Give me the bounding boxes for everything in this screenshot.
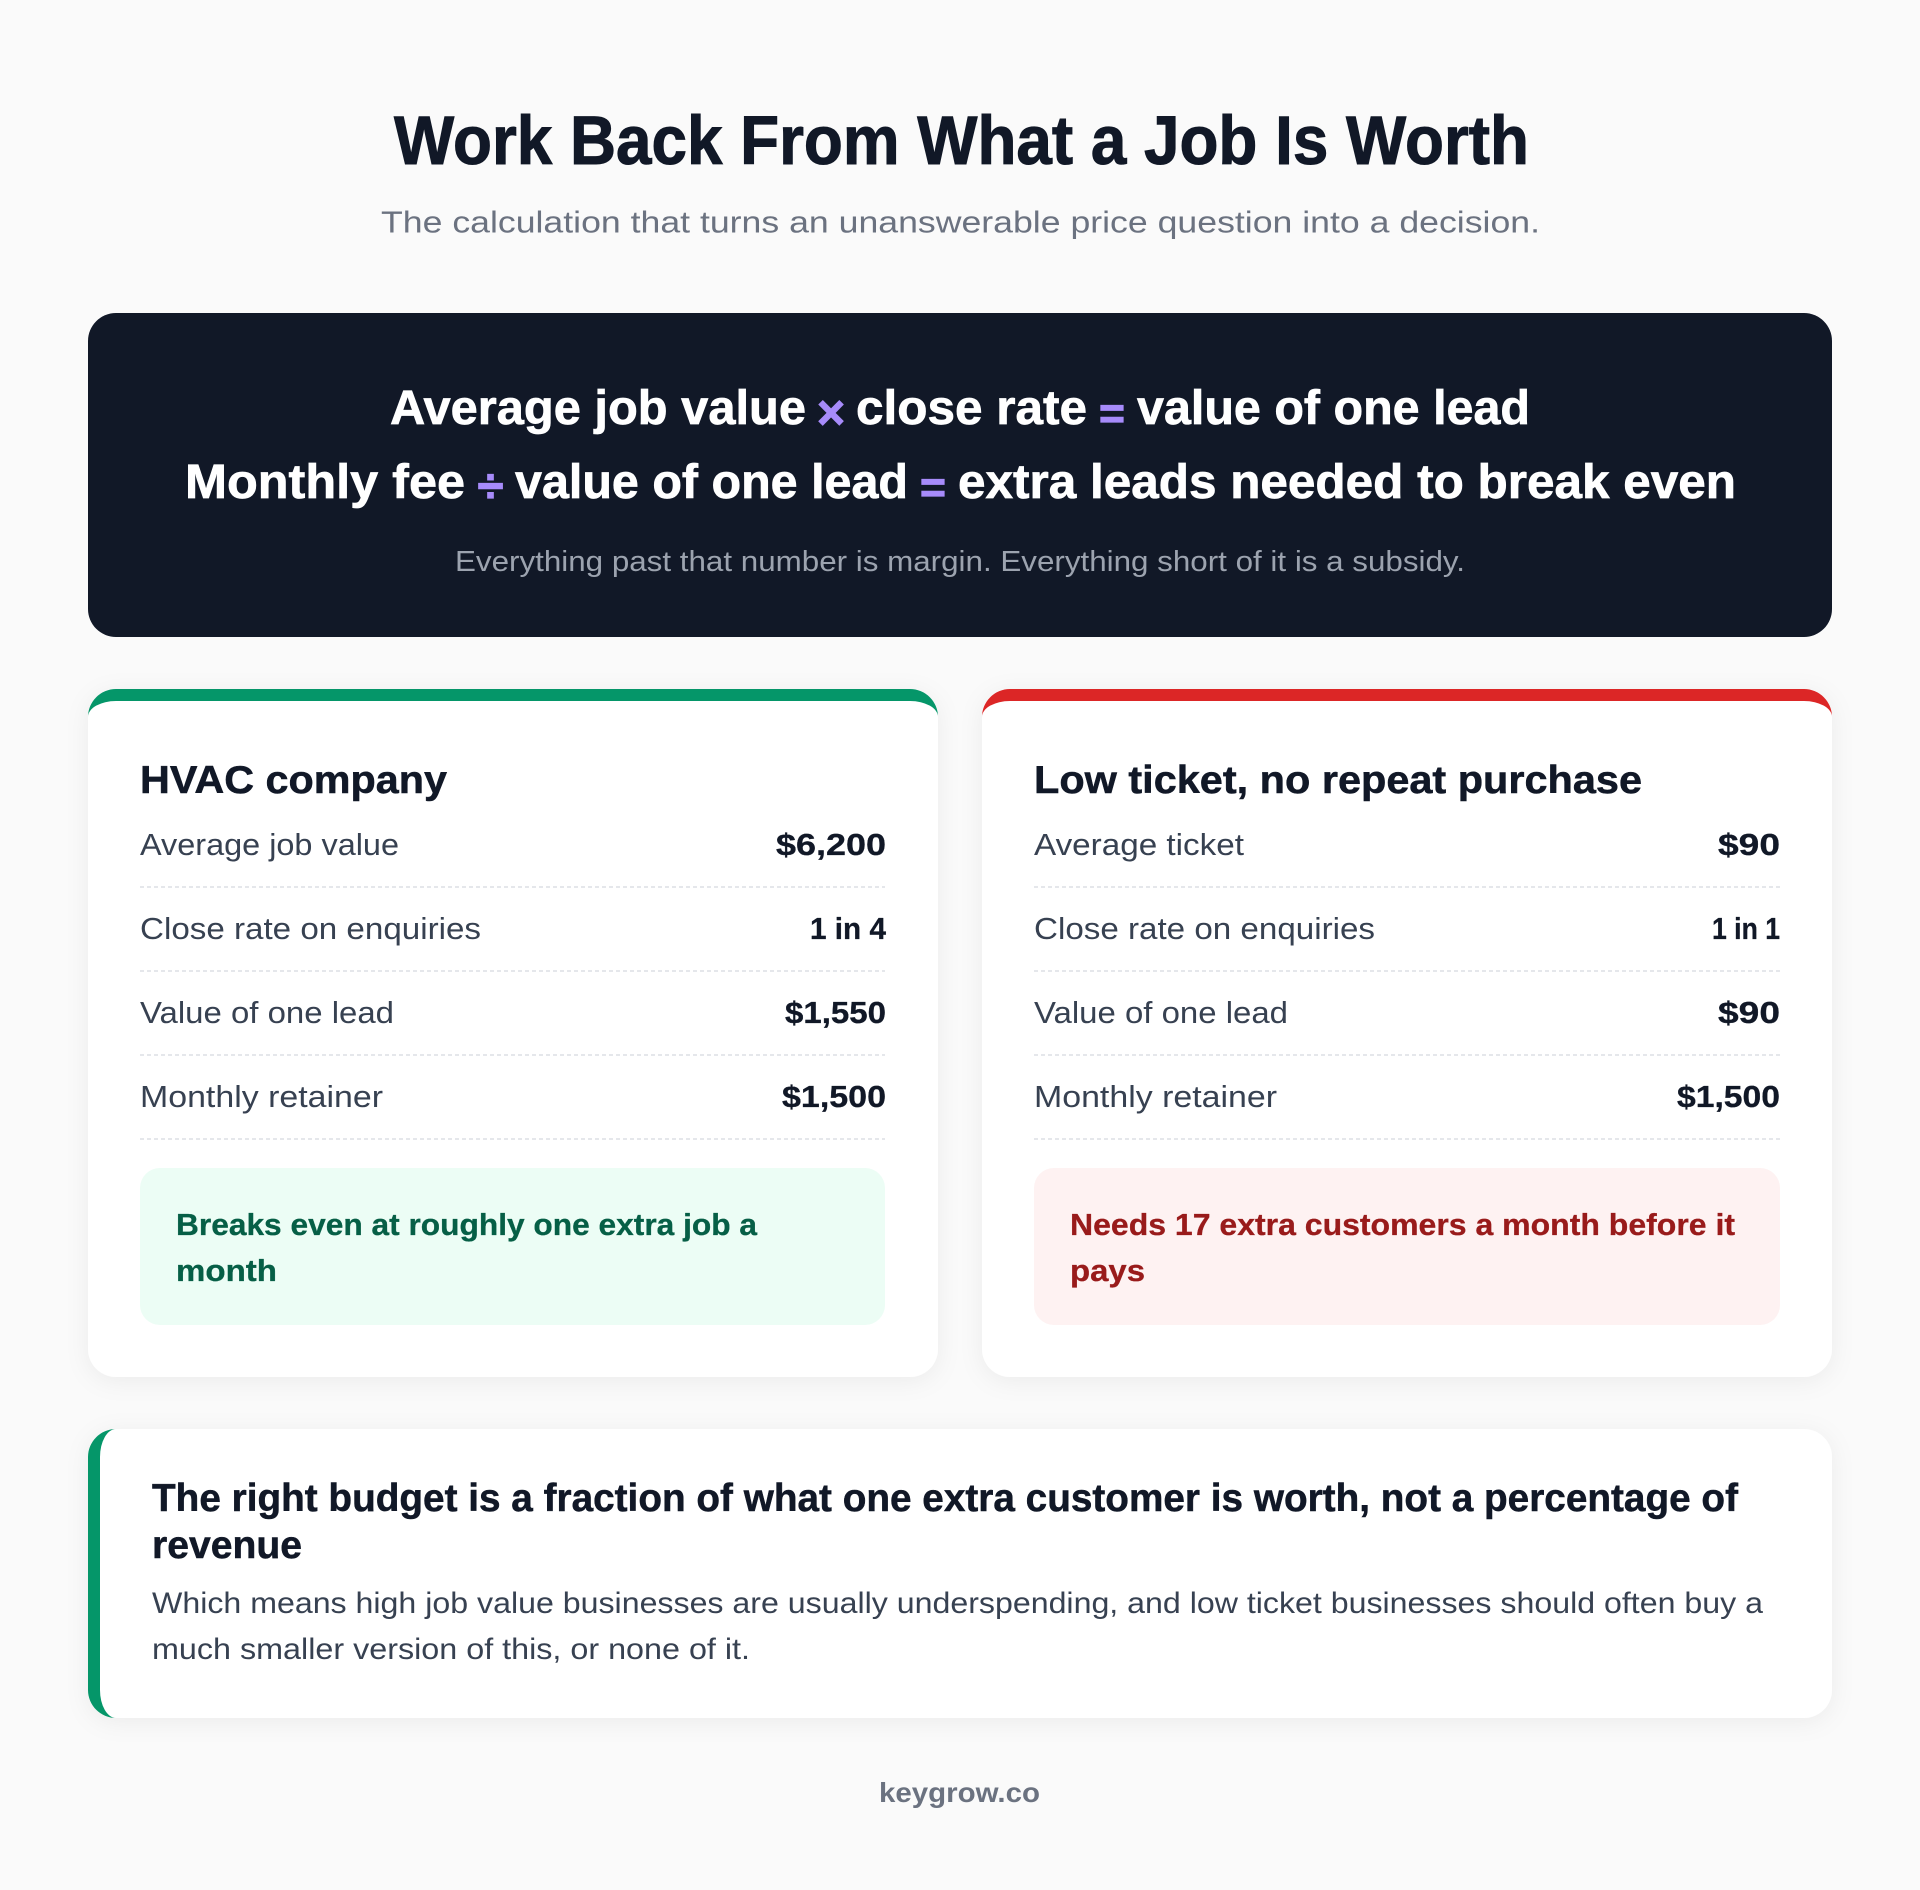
row: value of one lead: Value of one lead (140, 995, 394, 1030)
formula line 2: ÷ (478, 459, 503, 512)
takeaway heading (152, 1477, 1738, 1567)
takeaway heading: revenue (152, 1524, 302, 1567)
panel: low ticket (982, 689, 1832, 1377)
formula line 2: = (920, 463, 946, 512)
takeaway body (152, 1587, 1763, 1666)
card heading: Low ticket, no repeat purchase (1034, 759, 1642, 802)
title: Work Back From What a Job Is Worth (394, 102, 1529, 179)
row: monthly retainer: Monthly retainer (1034, 1079, 1277, 1114)
panel: takeaway (88, 1429, 1832, 1718)
card heading: HVAC company (140, 759, 448, 802)
row: average job value: $6,200 (776, 827, 886, 862)
formula line 2 (185, 455, 1736, 512)
formula line 1: Average job value (390, 381, 806, 435)
row: close rate (1034, 911, 1780, 946)
callout: extra customers (1034, 1168, 1780, 1325)
row: average ticket: $90 (1718, 827, 1780, 862)
footer brand: keygrow.co (879, 1777, 1040, 1808)
row: close rate (140, 911, 887, 946)
row: value of one lead: $90 (1718, 995, 1780, 1030)
panel: HVAC company (88, 689, 938, 1377)
callout: break even (140, 1168, 885, 1325)
row: monthly retainer: Monthly retainer (140, 1079, 383, 1114)
row: average ticket: Average ticket (1034, 827, 1244, 862)
callout: break even: Breaks even at roughly one extra job a (176, 1207, 758, 1242)
formula line 1: × (817, 387, 845, 440)
callout: extra customers: pays (1070, 1253, 1145, 1288)
row: average ticket (1034, 827, 1780, 862)
row: average job value: Average job value (140, 827, 399, 862)
row: monthly retainer (140, 1079, 886, 1114)
row: monthly retainer: $1,500 (1677, 1079, 1780, 1114)
callout: break even: month (176, 1253, 277, 1288)
row: value of one lead (140, 995, 886, 1030)
formula line 1 (390, 381, 1530, 440)
row: close rate: 1 in 4 (810, 911, 887, 946)
row: value of one lead: Value of one lead (1034, 995, 1288, 1030)
row: value of one lead (1034, 995, 1780, 1030)
formula line 1: value of one lead (1137, 381, 1530, 435)
formula note: Everything past that number is margin. Everything short of it is a subsidy. (455, 546, 1465, 578)
row: average job value (140, 827, 886, 862)
formula line 2: extra leads needed to break even (958, 455, 1736, 509)
formula line 1: = (1099, 389, 1125, 438)
row: close rate: Close rate on enquiries (140, 911, 481, 946)
row: close rate: 1 in 1 (1712, 911, 1780, 946)
row: monthly retainer (1034, 1079, 1780, 1114)
panel: formula (88, 313, 1832, 637)
formula line 1: close rate (856, 381, 1087, 435)
callout: extra customers: Needs 17 extra customers a month before it (1070, 1207, 1735, 1242)
takeaway body: Which means high job value businesses are usually underspending, and low ticket businesses should often buy a (152, 1587, 1763, 1620)
formula line 2: Monthly fee (185, 455, 465, 509)
formula line 2: value of one lead (515, 455, 908, 509)
subtitle: The calculation that turns an unanswerable price question into a decision. (381, 204, 1540, 240)
row: close rate: Close rate on enquiries (1034, 911, 1375, 946)
takeaway heading: The right budget is a fraction of what one extra customer is worth, not a percentage of (152, 1477, 1738, 1520)
takeaway body: much smaller version of this, or none of it. (152, 1633, 750, 1666)
row: monthly retainer: $1,500 (782, 1079, 886, 1114)
row: value of one lead: $1,550 (785, 995, 886, 1030)
